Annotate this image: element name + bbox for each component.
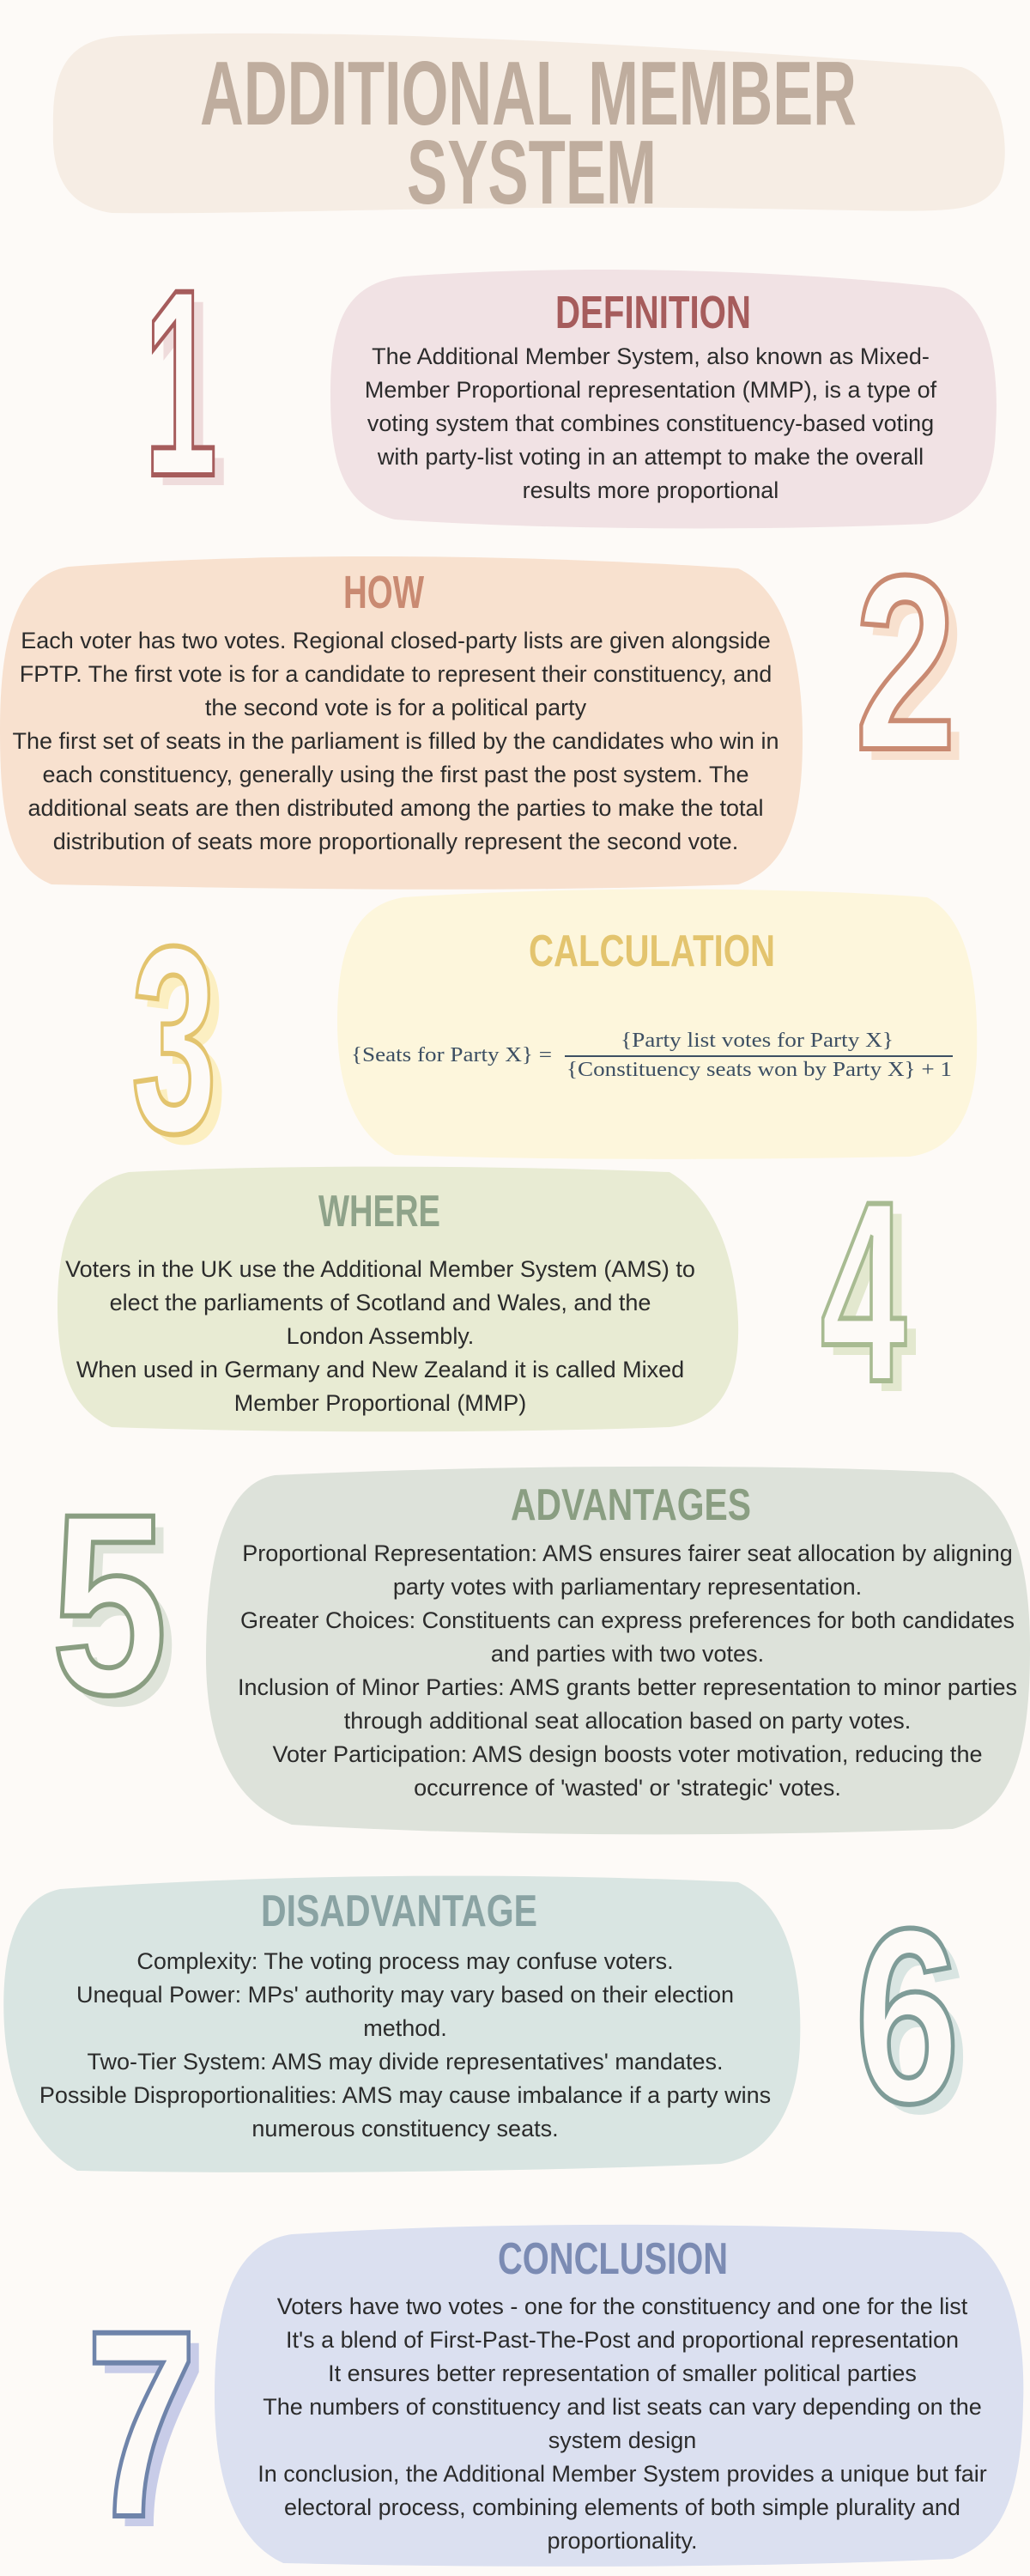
text: advantages: Inclusion of Minor Parties: AMS grants better representation to minor parties — [238, 1674, 1017, 1700]
text: how: Each voter has two votes. Regional closed-party lists are given alongside — [21, 628, 771, 653]
text: how: each constituency, generally using the first past the post system. The — [43, 762, 748, 787]
text: disadvantage: method. — [363, 2015, 447, 2041]
title text: SYSTEM — [407, 122, 657, 223]
number 3 — [131, 890, 227, 1199]
text: conclusion: It ensures better representation of smaller political parties — [328, 2360, 917, 2386]
text: conclusion: proportionality. — [547, 2528, 698, 2554]
number 2: 2 — [855, 524, 956, 802]
number 7: 7 — [86, 2275, 197, 2573]
panel: advantages — [206, 1467, 1030, 1834]
text: how: the second vote is for a political party — [205, 695, 587, 720]
text: advantages: Voter Participation: AMS design boosts voter motivation, reducing the — [273, 1741, 982, 1767]
text: conclusion: electoral process, combining elements of both simple plurality and — [284, 2494, 960, 2520]
heading: disadvantage: DISADVANTAGE — [261, 1886, 537, 1936]
number 7: 7 — [96, 2285, 208, 2576]
number 1: 1 — [144, 234, 217, 532]
text: definition: with party-list voting in an attempt to make the overall — [377, 444, 924, 470]
text: how: FPTP. The first vote is for a candidate to represent their constituency, and — [20, 661, 772, 687]
text: definition: results more proportional — [523, 477, 779, 503]
text: where — [65, 1256, 695, 1416]
number 4: 4 — [831, 1157, 918, 1446]
text: disadvantage: Unequal Power: MPs' authority may vary based on their election — [76, 1982, 734, 2008]
text: where: When used in Germany and New Zealand it is called Mixed — [76, 1357, 684, 1382]
panel: definition — [330, 270, 997, 528]
panel: where — [58, 1167, 738, 1431]
panel: calculation — [337, 890, 977, 1159]
number 2: 2 — [865, 535, 966, 813]
text: 1 — [154, 244, 227, 542]
text: how: additional seats are then distributed among the parties to make the total — [27, 795, 764, 821]
text: disadvantage: Two-Tier System: AMS may divide representatives' mandates. — [88, 2049, 723, 2075]
text: conclusion: Voters have two votes - one for the constituency and one for the list — [277, 2293, 968, 2319]
text: advantages — [238, 1540, 1017, 1801]
formula: {Seats for Party X} = — [351, 1044, 552, 1066]
text: disadvantage: Possible Disproportionalities: AMS may cause imbalance if a party wins — [39, 2082, 771, 2108]
text: how: distribution of seats more proportionally represent the second vote. — [53, 829, 738, 854]
text: advantages: and parties with two votes. — [491, 1641, 764, 1667]
number 5: 5 — [52, 1460, 167, 1748]
panel: conclusion — [215, 2225, 1023, 2567]
text: advantages: Proportional Representation: AMS ensures fairer seat allocation by aligning — [242, 1540, 1013, 1566]
text: conclusion: The numbers of constituency and list seats can vary depending on the — [263, 2394, 982, 2420]
title banner — [53, 33, 1005, 223]
text: definition — [365, 343, 937, 503]
formula: {Constituency seats won by Party X} + 1 — [566, 1059, 952, 1081]
number 6: 6 — [865, 1887, 970, 2166]
panel: how — [0, 556, 803, 890]
text: advantages: Greater Choices: Constituents can express preferences for both candidates — [240, 1607, 1015, 1633]
heading: conclusion: CONCLUSION — [498, 2234, 728, 2284]
number 3: 3 — [131, 890, 217, 1188]
text: where: London Assembly. — [287, 1323, 474, 1349]
heading: advantages: ADVANTAGES — [511, 1480, 751, 1530]
text: disadvantage — [39, 1948, 771, 2142]
text: advantages: through additional seat allocation based on party votes. — [344, 1708, 911, 1734]
text: how: The first set of seats in the parliament is filled by the candidates who win in — [13, 728, 779, 754]
formula: {Party list votes for Party X} — [621, 1030, 894, 1052]
text: advantages: occurrence of 'wasted' or 'strategic' votes. — [414, 1775, 841, 1801]
text: disadvantage: numerous constituency seats. — [251, 2116, 559, 2142]
number 4 — [821, 1147, 918, 1446]
text: definition: voting system that combines constituency-based voting — [367, 410, 934, 436]
title text — [200, 43, 857, 223]
text: conclusion: system design — [548, 2427, 696, 2453]
text: where: Voters in the UK use the Additional Member System (AMS) to — [65, 1256, 695, 1282]
text: where: elect the parliaments of Scotland and Wales, and the — [110, 1290, 651, 1315]
heading: where: WHERE — [318, 1187, 440, 1236]
number 1 — [144, 234, 227, 542]
number 6: 6 — [855, 1877, 960, 2155]
number 4: 4 — [821, 1147, 907, 1436]
text: how — [13, 628, 779, 854]
text: where: Member Proportional (MMP) — [234, 1390, 526, 1416]
heading: how: HOW — [343, 567, 424, 618]
text: conclusion: In conclusion, the Additional Member System provides a unique but fair — [258, 2461, 987, 2487]
number 5: 5 — [62, 1471, 178, 1759]
text: advantages: party votes with parliamentary representation. — [393, 1574, 862, 1600]
number 3: 3 — [142, 901, 227, 1199]
formula — [351, 1030, 953, 1081]
text: definition: Member Proportional representation (MMP), is a type of — [365, 377, 937, 403]
heading: definition: DEFINITION — [555, 287, 751, 338]
panel: disadvantage — [3, 1876, 800, 2172]
text: definition: The Additional Member System, also known as Mixed- — [372, 343, 930, 369]
text: conclusion: It's a blend of First-Past-The-Post and proportional representation — [286, 2327, 959, 2353]
heading: calculation: CALCULATION — [529, 927, 775, 976]
text: conclusion — [258, 2293, 987, 2554]
text: disadvantage: Complexity: The voting process may confuse voters. — [136, 1948, 674, 1974]
